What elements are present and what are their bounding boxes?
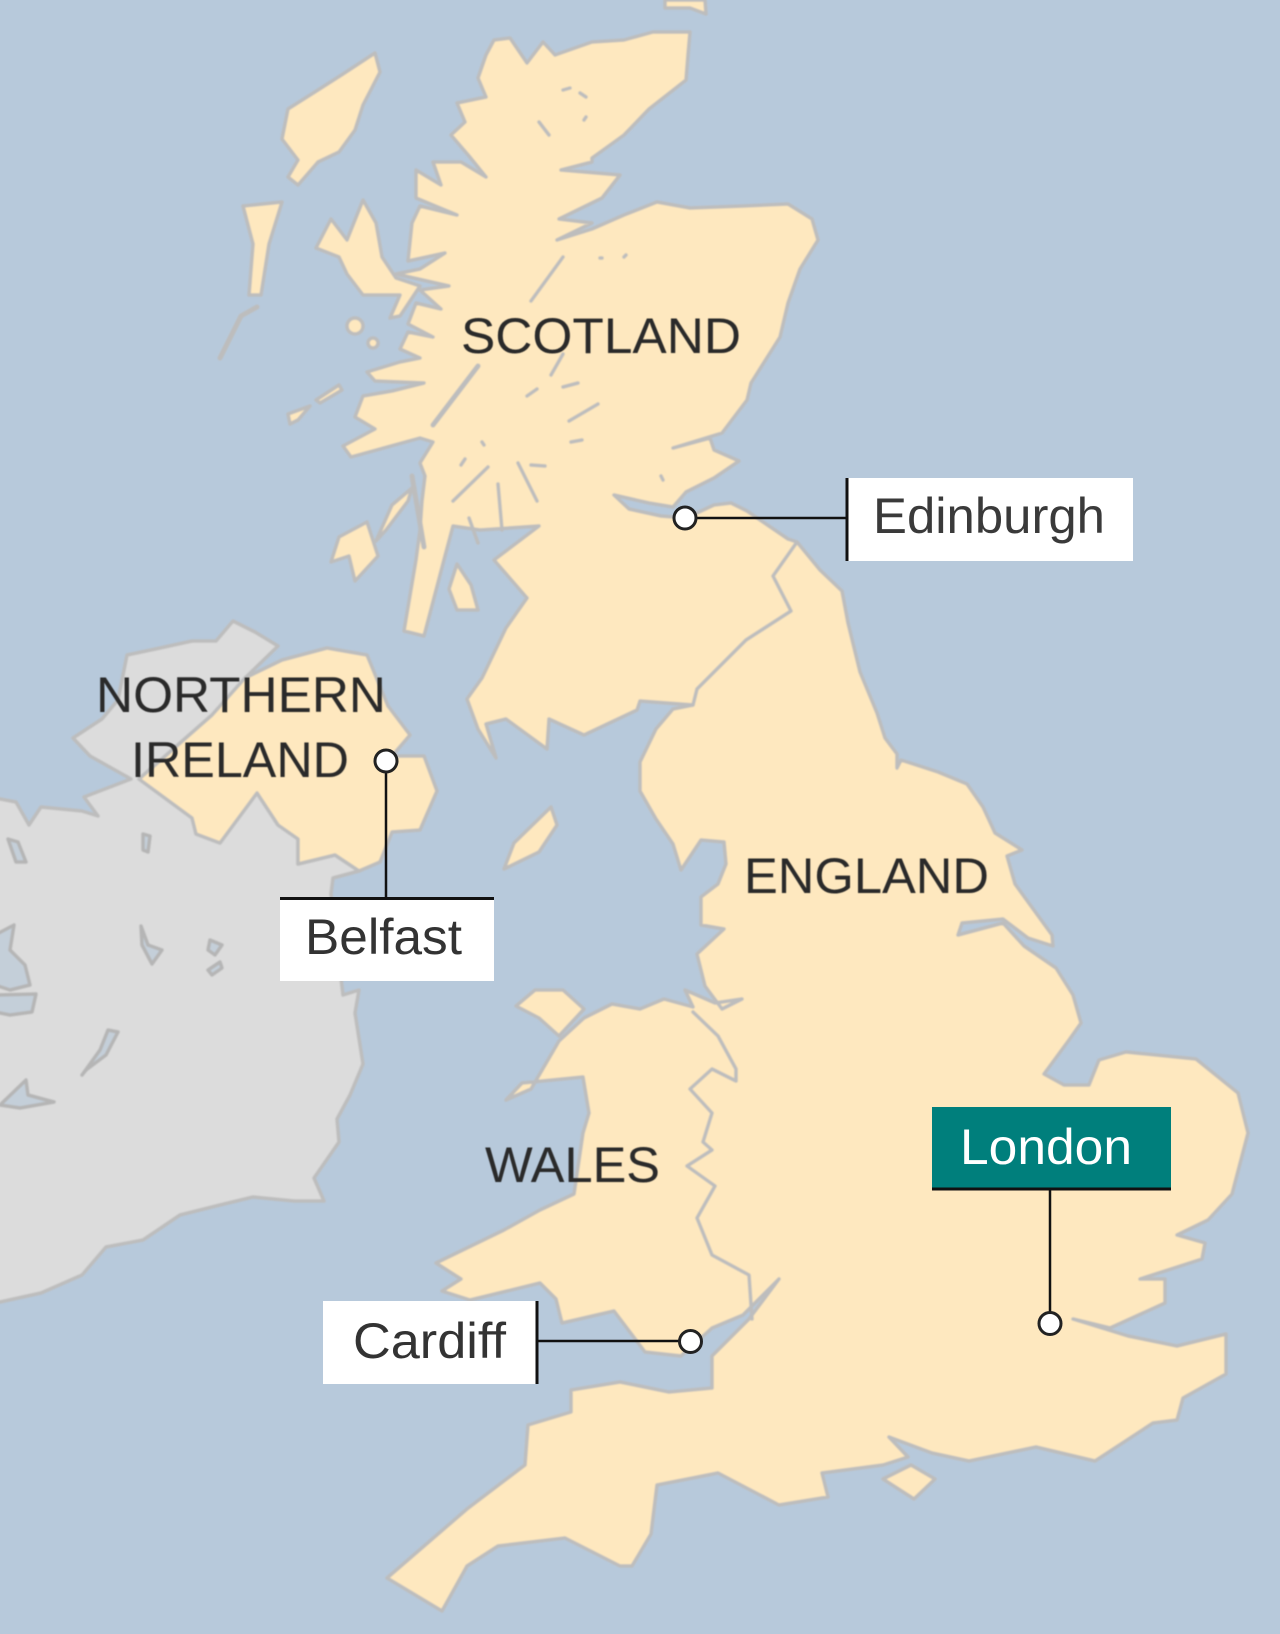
label: Scotland: SCOTLAND bbox=[461, 308, 741, 364]
lochs, borders and inlets bbox=[220, 88, 797, 1319]
Republic of Ireland bbox=[0, 621, 363, 1302]
Isle of Man, Anglesey and Isle of Wight bbox=[504, 807, 935, 1499]
callout: Cardiff: Cardiff bbox=[353, 1313, 506, 1369]
Scottish islands bbox=[243, 0, 706, 610]
Great Britain mainland bbox=[343, 32, 1248, 1611]
label: Wales: WALES bbox=[485, 1137, 660, 1193]
label: Northern Ireland: IRELAND bbox=[131, 732, 349, 788]
callout: Edinburgh: Edinburgh bbox=[873, 488, 1105, 544]
Irish lakes bbox=[0, 834, 222, 1108]
Northern Ireland bbox=[139, 648, 437, 871]
callout: Belfast: Belfast bbox=[305, 909, 462, 965]
callout: Edinburgh bbox=[674, 478, 1133, 561]
label: England: ENGLAND bbox=[744, 848, 989, 904]
callout: Cardiff bbox=[323, 1301, 702, 1384]
callout: London: London bbox=[960, 1119, 1132, 1175]
callout: London bbox=[932, 1107, 1171, 1334]
label: Northern Ireland: NORTHERN bbox=[96, 667, 386, 723]
label: Northern Ireland bbox=[96, 667, 386, 788]
callout: Belfast bbox=[280, 750, 494, 981]
